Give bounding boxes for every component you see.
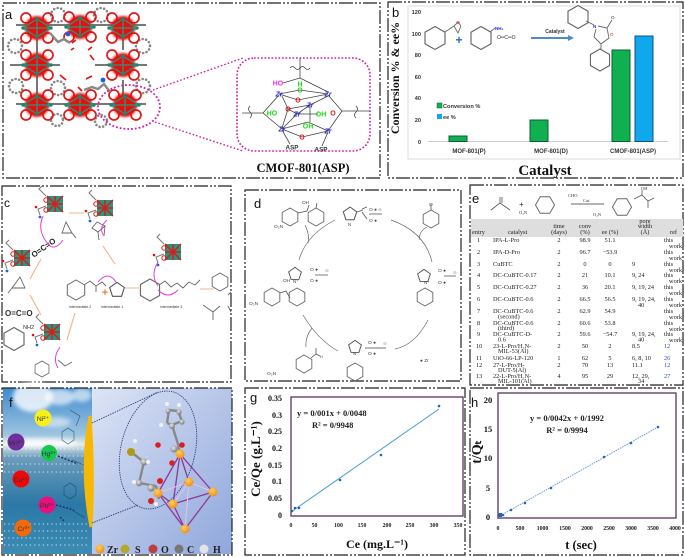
reaction scheme: O: [611, 15, 615, 20]
y ticks: 0.2: [272, 444, 282, 453]
metal ions: Ni²⁺: [37, 416, 50, 423]
molecules: O=C=O: [30, 236, 57, 260]
y axis tick labels: [412, 10, 421, 146]
table: 2: [557, 362, 561, 369]
panel: h, kinetic plot: [470, 388, 683, 555]
category labels: [452, 149, 656, 155]
molecules: N: [353, 351, 356, 356]
inset: Zr cluster: O: [297, 88, 303, 94]
table: UiO-66-LP-120: [493, 355, 533, 362]
legend: Conversion %: [443, 104, 480, 110]
metal ions: Cr³⁺: [17, 526, 31, 533]
table: 10.1: [604, 272, 616, 279]
table: 5: [608, 355, 612, 362]
plot frame: [498, 393, 676, 518]
inset: Zr cluster: HO: [273, 80, 284, 88]
table: work: [669, 255, 683, 262]
table: entry: [472, 229, 486, 236]
table: 2: [557, 331, 561, 338]
y axis tick labels: 120: [412, 10, 421, 16]
gold membrane: [85, 416, 92, 527]
table: 0: [583, 261, 587, 268]
category labels: MOF-801(D): [534, 149, 568, 155]
table: this: [664, 284, 674, 291]
table: work: [669, 337, 683, 344]
table: 54.9: [604, 308, 616, 315]
molecules: intermediate 2: [69, 305, 91, 309]
label b: b: [392, 5, 399, 20]
table: DC-CuBTC-0.6: [493, 296, 533, 303]
atom legend: Zr: [107, 545, 119, 556]
table: this: [664, 296, 674, 303]
atom legend: S: [135, 545, 141, 556]
table: IPA-L-Pro: [493, 237, 519, 244]
inset: Zr cluster: Zr: [324, 128, 333, 136]
reaction scheme: O: [610, 32, 614, 37]
y ticks: [268, 394, 282, 520]
x ticks: 150: [358, 523, 366, 529]
table: DC-CuBTC-0.17: [493, 272, 537, 279]
molecules: O ●: [438, 280, 446, 286]
reaction scheme: [425, 6, 615, 71]
table: 70: [582, 362, 588, 369]
molecules: O=C=O: [5, 309, 33, 318]
table: 2: [557, 320, 561, 327]
x ticks: 3500: [647, 526, 659, 532]
table: 9, 19, 24,: [632, 296, 656, 303]
table: 2: [557, 308, 561, 315]
x ticks: 2500: [603, 526, 615, 532]
label a: a: [5, 7, 13, 22]
molecules: H: [320, 354, 323, 359]
table: 11.1: [632, 362, 643, 369]
fit line and points: [498, 426, 659, 517]
x ticks: 100: [334, 523, 343, 529]
table: 9: [477, 331, 480, 338]
table: work: [669, 278, 683, 285]
table: 12, 29,: [632, 373, 650, 380]
axis title: Catalyst: Catalyst: [518, 163, 572, 179]
table: (%): [580, 229, 590, 236]
projection lines: [92, 392, 158, 523]
molecules: O ●: [369, 218, 377, 224]
table: 34: [638, 378, 645, 385]
table: 29: [607, 373, 613, 380]
table: 40: [638, 302, 644, 309]
metal ions: [8, 410, 57, 536]
panel: g, Langmuir plot: [245, 388, 465, 555]
table: 62: [582, 355, 588, 362]
table: (days): [551, 229, 567, 236]
table: MIL-53(Al): [498, 348, 528, 355]
table: 6, 8, 10: [632, 355, 651, 362]
table: IPA-D-Pro: [493, 249, 520, 256]
molecules: ⊖: [325, 268, 329, 273]
inset: Zr cluster: O: [299, 134, 305, 142]
table: ref: [670, 229, 678, 236]
reaction scheme: N: [593, 24, 596, 29]
table: 36: [582, 284, 588, 291]
table: this: [664, 331, 674, 338]
x ticks: 300: [430, 523, 438, 529]
inset: Zr cluster: ASP: [286, 144, 298, 152]
y ticks: 0.35: [268, 394, 282, 403]
x ticks: 350: [454, 523, 462, 529]
table: 9, 19, 24,: [632, 331, 656, 338]
inset: Zr cluster: Zr: [274, 92, 284, 98]
orange arrows: [30, 213, 214, 340]
y ticks: 0: [278, 511, 282, 520]
Zr key: ● Zr: [420, 358, 429, 364]
reaction scheme: Cat.: [583, 198, 590, 203]
table: 4: [557, 373, 561, 380]
table: width: [638, 223, 653, 230]
table: 2: [608, 343, 612, 350]
reaction scheme: NH₂: [495, 26, 504, 31]
panel: d, catalytic cycle: [245, 190, 461, 381]
table: 50: [582, 343, 588, 350]
table: work: [669, 302, 683, 309]
molecules: ⊖: [378, 207, 382, 212]
reaction scheme: O₂N: [519, 210, 528, 215]
table: 56.5: [604, 296, 616, 303]
table: 26: [664, 355, 670, 362]
table: work: [669, 243, 683, 250]
y ticks: [484, 395, 492, 522]
legend: [437, 103, 480, 121]
table: 22-L-Pro/H₂N-: [493, 373, 531, 380]
label e: e: [472, 191, 479, 206]
table: DUT-5(Al): [498, 367, 526, 374]
table: work: [669, 267, 683, 274]
inset: Zr cluster: O: [295, 98, 301, 104]
table: 12: [476, 362, 482, 369]
reaction scheme: O₂N: [593, 212, 602, 217]
reaction scheme: [491, 186, 654, 219]
metal ions: Pb²⁺: [40, 503, 54, 510]
table: work: [669, 290, 683, 297]
table: 1: [477, 237, 480, 244]
inset: Zr cluster: Zr: [292, 112, 302, 118]
x ticks: 250: [406, 523, 414, 529]
table: 2: [557, 272, 561, 279]
x ticks: 200: [383, 523, 391, 529]
chart plot background: [408, 6, 680, 159]
cycle arrows: [299, 220, 432, 351]
table: this: [664, 272, 674, 279]
y ticks: 0.25: [268, 427, 282, 436]
y axis tick labels: 100: [412, 32, 421, 38]
table: 2: [557, 261, 561, 268]
table: 8.5: [632, 343, 640, 350]
table: 11: [476, 355, 482, 362]
y ticks: 5: [486, 483, 490, 493]
table: DC-CuBTC-0.27: [493, 284, 537, 291]
y axis tick labels: 80: [415, 53, 421, 59]
x ticks: 3000: [625, 526, 637, 532]
label c: c: [4, 196, 10, 210]
fit line and points: [291, 405, 440, 512]
molecules: OH: [283, 278, 291, 284]
atom legend: C: [187, 545, 194, 556]
table: 12: [664, 362, 670, 369]
y ticks: 0.1: [272, 477, 282, 486]
table: this: [664, 237, 674, 244]
table: 4: [477, 272, 481, 279]
inset: Zr cluster: Zr: [306, 102, 315, 110]
table: 2: [557, 284, 561, 291]
metal ions: Cu²⁺: [14, 477, 29, 484]
inset: Zr cluster: H: [297, 82, 303, 88]
table: 27-L-Pro/H-: [493, 362, 524, 369]
panel: h, kinetic plot: R² = 0/9994: [546, 425, 588, 435]
molecules: N: [348, 222, 351, 227]
MOF fragments: [2, 186, 181, 346]
panel: b, catalyst bar chart: [388, 2, 683, 179]
y ticks: 0.15: [268, 461, 282, 470]
y axis title: t/Qₜ: [470, 440, 485, 464]
zoom connector lines: [153, 58, 243, 151]
molecule: [127, 402, 185, 506]
table: 5: [477, 284, 480, 291]
x ticks: 0: [497, 526, 500, 532]
molecules: [4, 222, 231, 377]
label g: g: [250, 390, 257, 405]
y ticks: 0.3: [272, 411, 282, 420]
dotted ellipse: [108, 383, 208, 517]
x ticks: [497, 526, 681, 532]
table: 2: [557, 237, 561, 244]
x axis title: Ce (mg.L⁻¹): [346, 537, 408, 551]
molecules: N⁺: [424, 280, 430, 285]
table: (second): [498, 314, 520, 320]
baseline: [428, 140, 668, 142]
reaction scheme: CHO: [568, 193, 578, 198]
table: 21: [582, 272, 588, 279]
table: 96.7: [579, 249, 591, 256]
table: [472, 218, 683, 385]
table: ee (%): [602, 229, 618, 236]
table: 7: [477, 308, 480, 315]
y ticks: 10: [484, 453, 492, 463]
table: MIL-101(Al): [498, 378, 532, 385]
table: catalyst: [508, 229, 527, 236]
table: 98.9: [579, 237, 591, 244]
atom legend: H: [213, 545, 221, 556]
x axis title: t (sec): [565, 538, 597, 552]
table: 2: [557, 249, 561, 256]
table: 2: [557, 296, 561, 303]
x ticks: [290, 523, 462, 529]
y axis tick labels: 20: [415, 118, 421, 124]
table: 60.6: [579, 320, 591, 327]
table: 23-L-Pro/H₂N-: [493, 343, 531, 350]
table: work: [669, 314, 683, 321]
category labels: CMOF-801(ASP): [610, 149, 656, 155]
MOF lattice: [8, 8, 150, 127]
x ticks: 500: [516, 526, 524, 532]
legend: ee %: [443, 115, 456, 121]
label h: h: [471, 395, 478, 410]
table: 1: [557, 355, 561, 362]
y ticks: 20: [484, 395, 492, 405]
table: 95: [582, 373, 588, 380]
table: work: [669, 326, 683, 333]
y ticks: 0: [486, 512, 490, 522]
dotted highlight ellipse: [98, 85, 160, 129]
molecules: O ●: [368, 340, 376, 346]
table: 27: [664, 373, 670, 380]
table: −53.9: [603, 249, 617, 256]
inset: Zr cluster: O: [285, 106, 291, 114]
reaction scheme: O═C═O: [497, 35, 516, 41]
table: 13: [476, 373, 482, 380]
label d: d: [254, 196, 261, 211]
axis title: Conversion % & ee%: Conversion % & ee%: [388, 22, 402, 134]
Zr octahedron: [154, 450, 218, 534]
table: time: [553, 223, 565, 230]
inset: Zr cluster: [237, 58, 370, 154]
equation: y = 0/0042x + 0/1992: [530, 413, 604, 423]
table: 59.6: [579, 331, 591, 338]
table: 9: [632, 261, 635, 268]
table: 2: [557, 343, 561, 350]
table: 8: [477, 320, 480, 327]
metal ions: Mn²⁺: [8, 440, 24, 447]
panel: c, reaction mechanism: [2, 186, 231, 382]
table: DC-CuBTC-0.6: [493, 320, 533, 327]
plot frame: [291, 397, 463, 516]
table header band: [471, 219, 683, 237]
y axis tick labels: 60: [415, 75, 421, 81]
molecules: O ●: [369, 207, 377, 213]
table: DC-CuBTC-0.6: [493, 308, 533, 315]
label f: f: [9, 395, 13, 410]
molecules: O₂N: [274, 224, 284, 230]
inset: Zr cluster: ASP: [315, 146, 327, 154]
table: (third): [498, 325, 514, 332]
equation: y = 0/001x + 0/0048: [297, 408, 367, 418]
table: 40: [638, 336, 644, 344]
reaction scheme: O: [456, 20, 460, 25]
table: 20.1: [604, 284, 616, 291]
molecules: ⊖: [453, 270, 457, 275]
table: this: [664, 308, 674, 315]
molecules: O ●: [438, 268, 446, 274]
molecules: ⊖: [383, 341, 387, 346]
molecules: +: [102, 287, 108, 299]
x ticks: 1000: [537, 526, 548, 532]
table: 66.5: [579, 296, 591, 303]
molecules: NH2: [23, 325, 34, 331]
inset: Zr cluster: O: [330, 110, 336, 118]
inset: Zr cluster: Zr: [324, 92, 333, 98]
reaction scheme: +: [455, 33, 463, 47]
atom legend: [96, 544, 221, 556]
x ticks: 0: [290, 523, 293, 529]
table: this: [664, 249, 674, 256]
table: 9, 24: [632, 272, 645, 279]
molecules: O ●: [310, 267, 318, 273]
inset: Zr cluster: OH: [316, 112, 326, 118]
table: 12: [664, 343, 670, 350]
table: this: [664, 261, 674, 268]
molecules: N⁺: [293, 279, 299, 284]
table: conv: [579, 223, 592, 230]
panel: e, data table: [470, 185, 683, 385]
x ticks: 4000: [669, 526, 681, 532]
table: 0: [608, 261, 612, 268]
metal ions: Hg²⁺: [42, 451, 57, 458]
water and sky photo: [2, 382, 92, 554]
table: 6: [477, 296, 480, 303]
molecules: O: [429, 202, 433, 208]
table: (Å): [641, 228, 649, 236]
x ticks: 2000: [581, 526, 593, 532]
y axis title: Ce/Qe (g.L⁻¹): [248, 421, 263, 497]
right pale blue background: [92, 388, 232, 554]
molecules: O ●: [368, 351, 376, 357]
x ticks: 1500: [559, 526, 571, 532]
table: this: [664, 320, 674, 327]
table: DC-CuBTC-D-: [493, 331, 532, 338]
table: 51.1: [604, 237, 616, 244]
reaction scheme: OH: [641, 186, 648, 191]
y ticks: 0.05: [268, 494, 282, 503]
y axis tick labels: 0: [418, 140, 421, 146]
reaction scheme: Catalyst: [545, 29, 565, 35]
table: 2: [477, 249, 480, 256]
inset: Zr cluster: OH: [303, 124, 313, 130]
table: 3: [477, 261, 480, 268]
bars: [449, 36, 653, 142]
table: CuBTC: [493, 261, 513, 268]
molecules: intermediate 1: [101, 305, 123, 309]
molecules: OH: [302, 200, 310, 206]
y ticks: 15: [484, 424, 492, 434]
atom legend: O: [161, 545, 169, 556]
table: −54.7: [603, 331, 617, 338]
inset: Zr cluster: Zr: [278, 126, 287, 134]
table: 9, 19, 24: [632, 284, 655, 291]
table: 0.6: [498, 336, 506, 344]
molecules: intermediate 3: [160, 305, 182, 309]
table: 10: [476, 343, 482, 350]
category labels: MOF-801(P): [452, 149, 486, 155]
inset: Zr cluster: HO: [267, 110, 278, 118]
molecules: O₂N: [267, 371, 277, 377]
table: 13: [607, 362, 613, 369]
y axis tick labels: 40: [415, 96, 421, 102]
table: pore: [639, 218, 651, 225]
magenta curved arrows: [41, 216, 178, 368]
molecules: [249, 200, 457, 381]
panel: g, Langmuir plot: R² = 0/9948: [312, 420, 353, 430]
panel: f, heavy metal adsorption: [2, 382, 232, 556]
panel: a, MOF structure: [3, 3, 380, 178]
table: 53.8: [604, 320, 616, 327]
x ticks: 50: [312, 523, 318, 529]
molecules: O₂N: [249, 301, 259, 307]
caption CMOF-801(ASP): CMOF-801(ASP): [256, 161, 350, 175]
table: 62.9: [579, 308, 591, 315]
reaction scheme: +: [519, 200, 524, 209]
molecules: O ●: [310, 278, 318, 284]
